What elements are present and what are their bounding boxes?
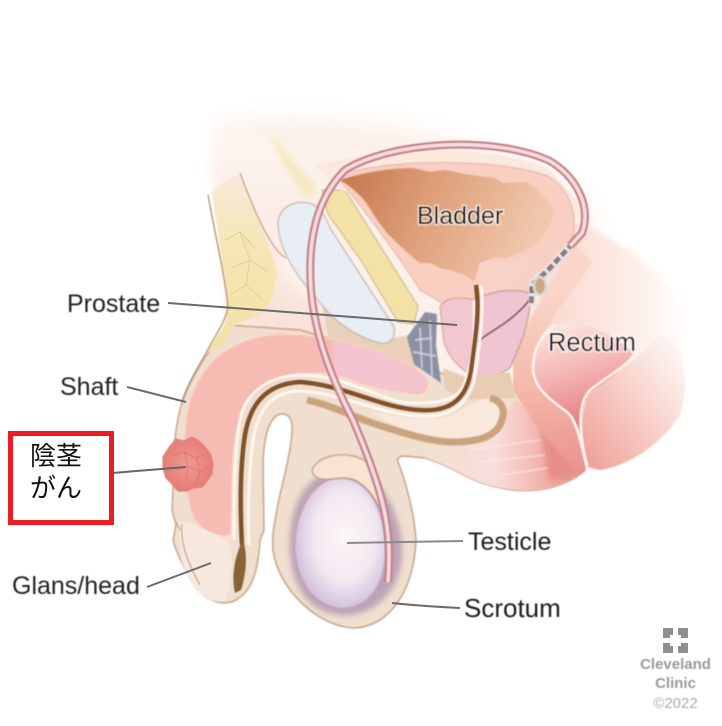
rectum: [513, 243, 685, 474]
tan tissue below prostate: [443, 368, 516, 400]
penile cancer tumor: [163, 437, 213, 491]
tumor texture: [172, 452, 208, 484]
label: Scrotum: Scrotum: [464, 593, 561, 623]
bladder neck pale lobe: [478, 252, 532, 298]
bladder: [315, 150, 585, 304]
pubic bone: [278, 202, 394, 343]
penile bulb cream: [370, 398, 505, 442]
prostate left lobe: [440, 298, 474, 373]
leader line: prostate: [168, 303, 457, 325]
urethral meatus: [233, 540, 246, 593]
right pelvic flesh fading to white: [520, 222, 690, 470]
ampulla loop: [534, 277, 546, 295]
upper yellow sliver: [270, 133, 318, 200]
rectal right lobe: [582, 333, 685, 470]
vein cluster: [407, 312, 441, 383]
vesicle duct chain: [531, 243, 573, 306]
tumor body: [163, 437, 213, 491]
upper left pale tissue: [212, 132, 392, 345]
rectal lining left: [533, 325, 587, 467]
pale dome above bladder: [315, 150, 585, 240]
callout: penile cancer box: 陰茎: [30, 441, 82, 471]
rectal lumen: [533, 324, 633, 440]
anatomy illustration: [163, 117, 690, 628]
venous plexus: [407, 312, 441, 383]
label: Bladder: Bladder: [417, 202, 503, 230]
logo: Cleveland Clinic: [640, 628, 711, 712]
urethra upper highlight: [234, 300, 474, 540]
callout: penile cancer box: がん: [30, 473, 82, 503]
vas tube outer: [310, 145, 585, 582]
ejaculatory duct: [478, 297, 532, 342]
leader line: shaft: [127, 387, 186, 402]
prepuce fold lines: [176, 522, 200, 585]
penile bulb band: [307, 398, 503, 442]
label: Prostate: Prostate: [67, 290, 160, 318]
callout: penile cancer box: [10, 434, 112, 522]
urethra: [233, 285, 482, 593]
perineum striations: [470, 440, 548, 475]
testicle: [295, 478, 385, 608]
epididymis: [312, 455, 387, 525]
penis, scrotum and perineum base: [172, 325, 590, 628]
logo: Cleveland Clinic: ©2022: [653, 695, 698, 712]
leader line: testicle: [347, 541, 463, 543]
scrotal lining: [290, 470, 402, 615]
fat pad cell texture: [225, 232, 268, 300]
prostate: [440, 291, 532, 378]
muscle edge line: [240, 173, 286, 258]
pelvic outline left: [182, 195, 228, 402]
penile shaft erectile tissue: [184, 334, 428, 536]
seminal vesicle: [531, 243, 573, 306]
prostate right lobe: [476, 291, 530, 378]
fat pad: central yellow band: [322, 190, 418, 324]
urethra lower highlight: [248, 285, 482, 545]
bladder wall: [337, 162, 574, 304]
vas tube inner: [310, 145, 585, 582]
fat pad: left yellow band: [207, 173, 277, 353]
logo: Cleveland Clinic: Cleveland: [640, 656, 711, 673]
vesicle outline: [531, 243, 573, 306]
label: Testicle: Testicle: [468, 528, 551, 556]
glans: [178, 522, 232, 601]
label: Glans/head: Glans/head: [12, 572, 140, 600]
urethra tube: [241, 285, 477, 545]
leader line: glans: [147, 563, 211, 587]
label: Rectum: Rectum: [548, 329, 636, 357]
perineum pink gradient: [420, 400, 586, 490]
anal sphincter patch: [540, 425, 580, 480]
logo: Cleveland Clinic: Clinic: [655, 675, 696, 692]
label: Shaft: Shaft: [60, 373, 118, 401]
icon: cross mark: [663, 628, 688, 653]
leader line: scrotum: [392, 603, 460, 608]
vas deferens: [310, 145, 585, 582]
corpus lighter end: [332, 340, 426, 394]
soft pelvic tissue background: [215, 117, 594, 420]
leader line: penile cancer: [112, 467, 186, 473]
rectal lining right: [581, 345, 645, 466]
tan tissue under pubic bone: [322, 305, 420, 380]
bladder cavity: [340, 168, 554, 282]
rectal wall: [513, 243, 592, 474]
